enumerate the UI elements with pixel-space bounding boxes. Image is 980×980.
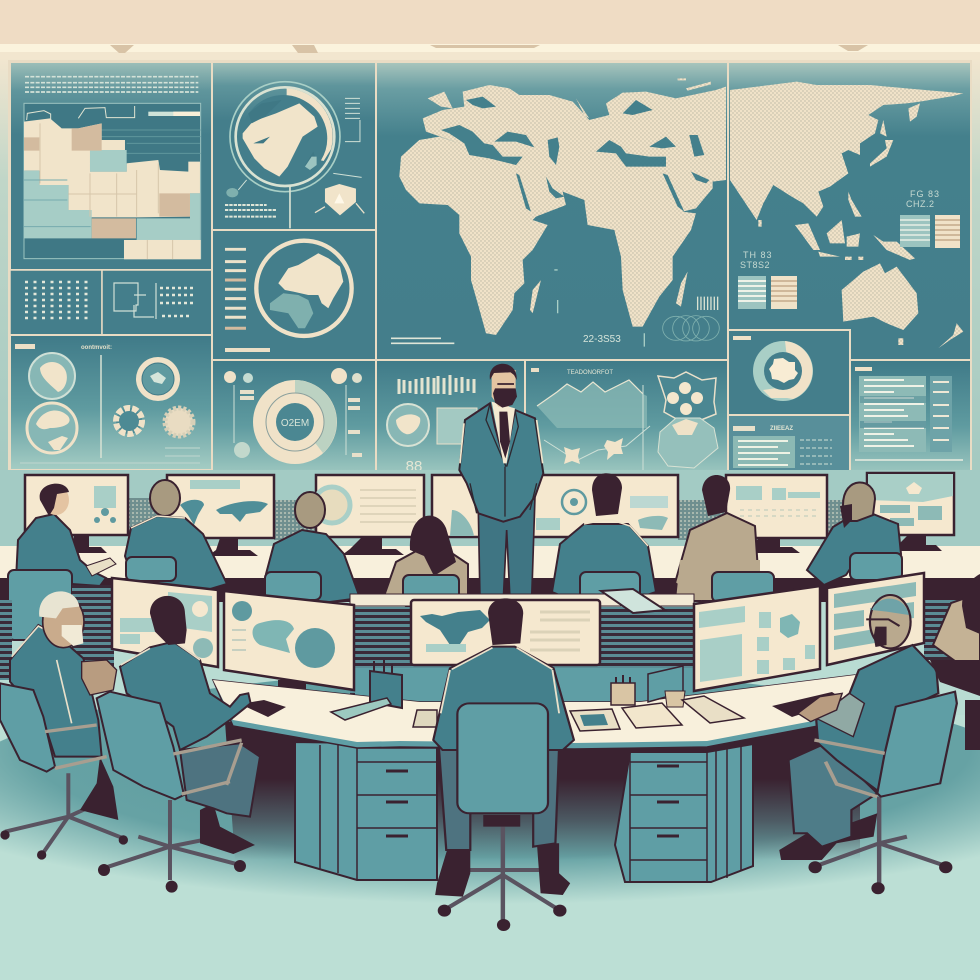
supervisor legs	[478, 497, 535, 599]
middle desk divider	[0, 570, 980, 708]
monitor center	[411, 600, 600, 665]
monitor 3	[314, 475, 424, 555]
monitor right b	[827, 573, 924, 665]
operator 1	[16, 484, 116, 586]
pencil cup	[611, 675, 635, 705]
map label upper: FG 83	[910, 189, 940, 199]
panel: bar histogram	[376, 360, 525, 480]
back row monitors	[0, 470, 980, 602]
panel: flow diagram	[102, 270, 212, 335]
panel: globe	[212, 230, 376, 360]
report	[570, 709, 620, 731]
shirt and tie	[492, 402, 515, 463]
panel: Asia-Pacific map	[728, 62, 971, 360]
front desk base	[213, 675, 870, 882]
left wall chair	[8, 570, 72, 640]
monitor 1	[25, 475, 128, 553]
monitor left b	[224, 591, 354, 700]
binder	[648, 666, 683, 702]
panel: data table	[850, 360, 971, 480]
panel: globes and gears: oontmvoit:	[81, 345, 112, 351]
monitor 2	[167, 475, 274, 556]
standing supervisor	[459, 364, 543, 599]
under-desk shadow	[225, 712, 860, 860]
pen holder	[370, 660, 402, 708]
panel: table small	[728, 415, 850, 480]
video wall	[9, 61, 971, 481]
operator 2	[125, 480, 227, 590]
operator C with chair	[433, 598, 574, 931]
panel: donut chart	[212, 360, 376, 480]
operator 5	[552, 473, 656, 602]
floor	[0, 670, 980, 980]
donut value: O2EM	[281, 418, 309, 429]
desk top	[213, 675, 870, 749]
operators back row	[16, 473, 902, 607]
table title: ZIIEEAZ	[770, 426, 793, 432]
ceiling	[0, 0, 980, 61]
keyboard right	[772, 692, 844, 717]
papers left	[331, 698, 391, 720]
mug	[665, 691, 685, 707]
operator B with chair	[97, 596, 260, 893]
document stack	[622, 703, 682, 728]
panel figure: 88	[406, 458, 422, 475]
keyboard left	[240, 700, 286, 717]
map label lower: TH 83	[743, 250, 773, 260]
tablet on divider	[601, 589, 665, 613]
wall backdrop	[0, 58, 980, 548]
panel: heat-block chart	[10, 62, 212, 270]
back desk	[0, 546, 980, 582]
map data table	[738, 276, 797, 309]
operator 6	[675, 475, 774, 602]
supervisor jacket	[459, 403, 543, 522]
operator 3	[265, 492, 360, 602]
front row operators	[0, 574, 980, 931]
chart title: TEADONORFOT	[567, 370, 613, 376]
operator E far right	[930, 574, 980, 750]
monitor left a	[112, 578, 218, 667]
panel: dot matrix	[10, 270, 102, 335]
map data bars	[900, 215, 960, 248]
panel: ring gauge	[728, 330, 850, 415]
monitor 6	[867, 473, 954, 551]
operator 7	[807, 482, 902, 585]
desk items	[240, 589, 844, 731]
map label middle: CHZ.2	[906, 199, 935, 209]
operator D with chair	[779, 595, 957, 894]
monitor 5	[726, 475, 827, 553]
loose sheet	[682, 696, 744, 723]
map label lowest: ST8S2	[740, 260, 770, 270]
panel: radar globe	[212, 62, 376, 230]
panel: globes and gears	[10, 335, 212, 470]
monitor 4	[432, 475, 678, 537]
panel: world map	[376, 62, 728, 360]
operator 4	[384, 516, 468, 607]
panel: line chart	[525, 360, 728, 480]
notepad	[413, 710, 437, 727]
map continents	[391, 78, 726, 347]
head	[492, 370, 516, 407]
operator A with chair	[0, 591, 128, 860]
drawer cabinet left	[295, 742, 437, 880]
drawer cabinet right	[615, 744, 753, 882]
monitor right a	[694, 586, 820, 704]
map label: 22-3S53	[583, 334, 621, 345]
front monitors	[112, 573, 924, 704]
